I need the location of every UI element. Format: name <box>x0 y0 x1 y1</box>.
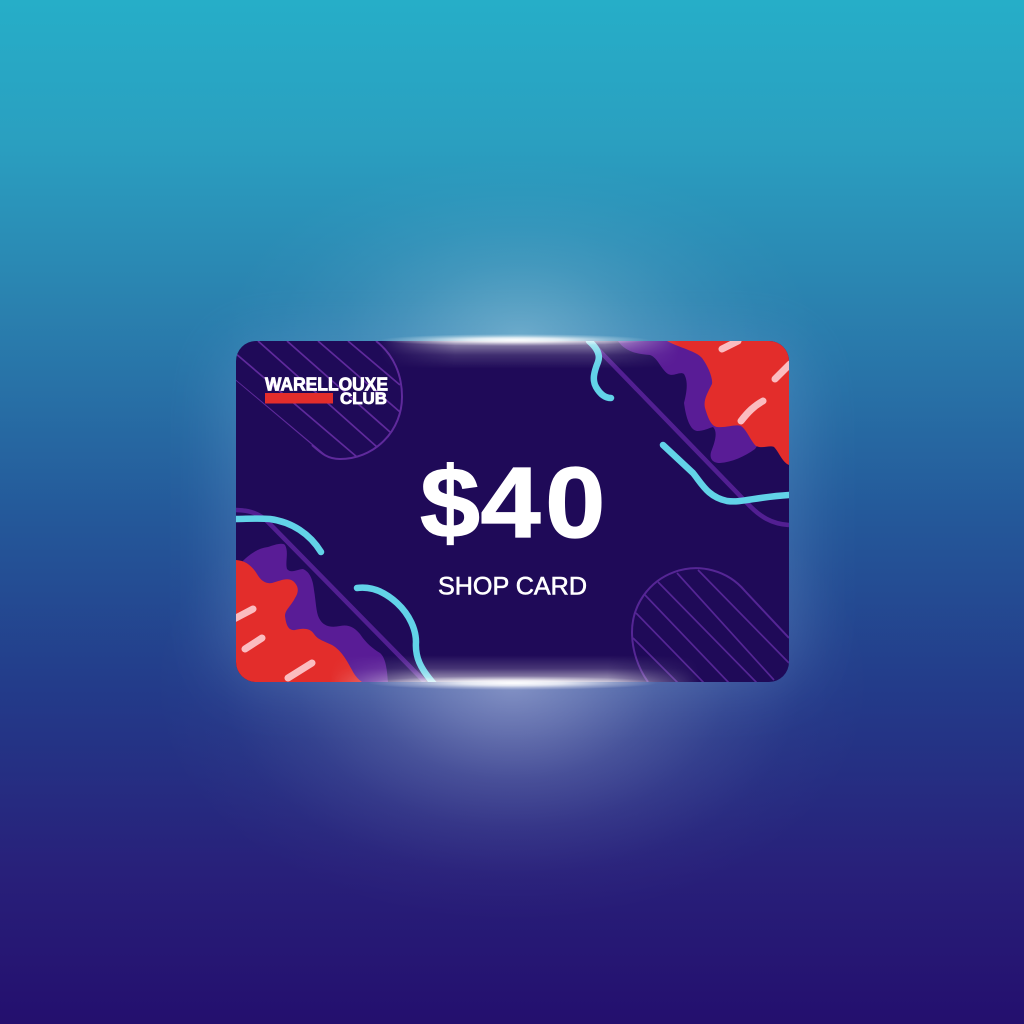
purple blob <box>618 341 789 463</box>
panel: gift card <box>234 341 790 684</box>
diagonal purple line <box>235 510 425 682</box>
cyan squiggle upper <box>589 341 611 398</box>
light bar: top edge <box>380 334 650 346</box>
hatched shape: top left <box>235 341 402 459</box>
logo: Warellouxe Club <box>264 377 388 404</box>
purple blob <box>240 544 388 682</box>
pink dashes <box>234 609 312 678</box>
card edge light wash <box>330 341 700 682</box>
logo: Warellouxe Club: WARELLOUXE <box>265 374 388 394</box>
red blob <box>667 341 789 465</box>
light bar: bottom edge <box>368 676 658 690</box>
cyan arc lower <box>357 588 434 684</box>
pink dashes <box>722 341 790 421</box>
value: $40: $40 <box>420 448 605 559</box>
diagonal purple line <box>590 341 789 525</box>
cyan arc upper <box>235 519 321 552</box>
cyan squiggle lower <box>663 445 789 501</box>
red blob <box>235 560 362 682</box>
label: shop card: SHOP CARD <box>438 572 587 600</box>
bottom left decoration <box>234 510 434 684</box>
top right decoration <box>589 341 790 525</box>
logo: Warellouxe Club: CLUB <box>340 390 387 408</box>
hatched shape: bottom right <box>632 568 789 684</box>
